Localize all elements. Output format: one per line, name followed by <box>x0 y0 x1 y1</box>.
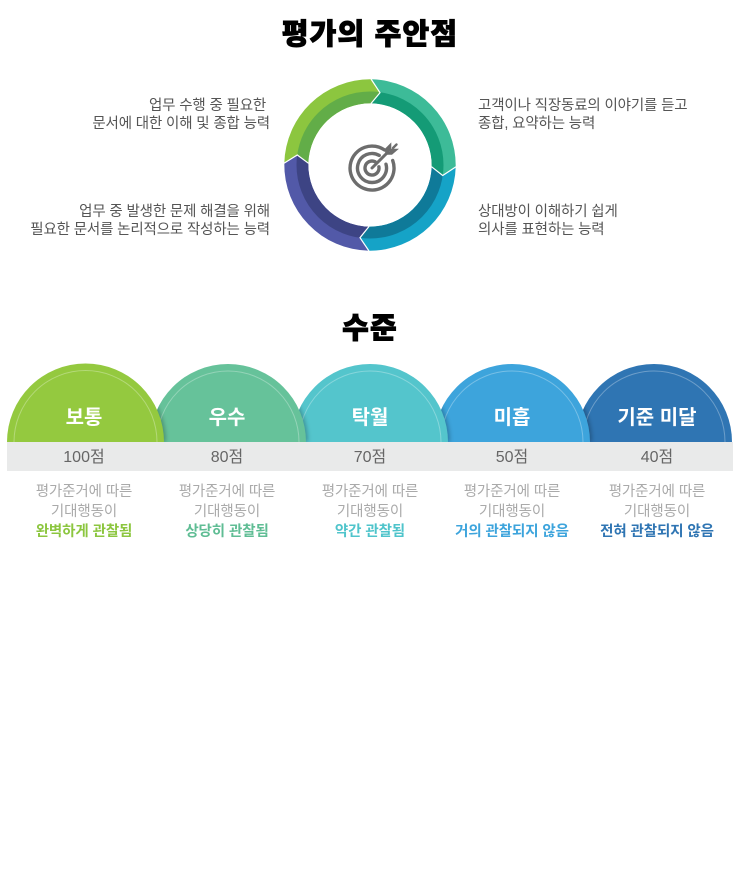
score band <box>7 442 733 471</box>
segment: teal <box>372 79 456 175</box>
text: bottom-right item <box>478 203 618 238</box>
dome: 우수 <box>150 364 308 442</box>
icon: target with arrow <box>350 144 396 190</box>
text: top-right item <box>478 98 687 132</box>
segment: indigo <box>284 156 368 251</box>
description: 기준 미달: 평가준거에 따른 <box>609 484 705 500</box>
description: 기준 미달 <box>600 484 714 540</box>
white seams between segments <box>284 79 456 251</box>
description: 보통: 평가준거에 따른 <box>36 484 132 500</box>
score: 80점: 80점 <box>211 449 243 466</box>
description: 탁월: 기대행동이 <box>337 504 403 520</box>
description: 미흡: 평가준거에 따른 <box>464 484 560 500</box>
description: 우수: 기대행동이 <box>194 504 260 520</box>
title: 평가의 주안점: 평가의 주안점 <box>282 19 458 51</box>
heading: 수준: 수준 <box>342 313 398 345</box>
score: 50점: 50점 <box>496 449 528 466</box>
segment: blue <box>360 168 456 251</box>
label: 미흡: 미흡 <box>494 407 530 429</box>
label: 탁월: 탁월 <box>352 407 388 429</box>
score: 40점: 40점 <box>641 449 673 466</box>
label: 우수: 우수 <box>209 407 245 429</box>
description: 미흡: 기대행동이 <box>479 504 545 520</box>
text: bottom-right item: 의사를 표현하는 능력 <box>478 222 604 238</box>
text: top-left item: 업무 수행 중 필요한 <box>149 98 266 114</box>
description: 우수: 상당히 관찰됨 <box>185 524 269 540</box>
description: 탁월: 평가준거에 따른 <box>322 484 418 500</box>
text: bottom-left item <box>30 204 270 238</box>
description: 기준 미달: 기대행동이 <box>624 504 690 520</box>
text: top-right item: 고객이나 직장동료의 이야기를 듣고 <box>478 98 687 114</box>
text: bottom-left item: 업무 중 발생한 문제 해결을 위해 <box>79 204 270 220</box>
score: 70점: 70점 <box>354 449 386 466</box>
description: 미흡: 거의 관찰되지 않음 <box>455 524 569 540</box>
score: 100점: 100점 <box>63 449 105 466</box>
text: bottom-left item: 필요한 문서를 논리적으로 작성하는 능력 <box>30 222 270 238</box>
description: 우수 <box>179 484 275 540</box>
dome: 탁월 <box>292 364 450 442</box>
description: 보통 <box>36 484 132 540</box>
description: 탁월: 약간 관찰됨 <box>335 524 405 540</box>
label: 보통: 보통 <box>66 407 102 429</box>
level domes <box>7 364 732 442</box>
description: 기준 미달: 전혀 관찰되지 않음 <box>600 524 714 540</box>
text: top-left item: 문서에 대한 이해 및 종합 능력 <box>92 116 270 132</box>
text: top-left item <box>92 98 270 132</box>
description: 미흡 <box>455 484 569 540</box>
description: 탁월 <box>322 484 418 540</box>
segment: green <box>284 79 380 162</box>
text: top-right item: 종합, 요약하는 능력 <box>478 116 595 132</box>
description: 보통: 기대행동이 <box>51 504 117 520</box>
dome: 미흡 <box>434 364 592 442</box>
dome: 기준 미달 <box>576 364 732 442</box>
ring diagram with target icon <box>284 79 456 251</box>
description: 우수: 평가준거에 따른 <box>179 484 275 500</box>
dome: 보통 <box>7 364 166 442</box>
description: 보통: 완벽하게 관찰됨 <box>36 524 132 540</box>
level labels <box>66 407 697 429</box>
text: bottom-right item: 상대방이 이해하기 쉽게 <box>478 204 618 220</box>
label: 기준 미달: 기준 미달 <box>617 407 697 429</box>
